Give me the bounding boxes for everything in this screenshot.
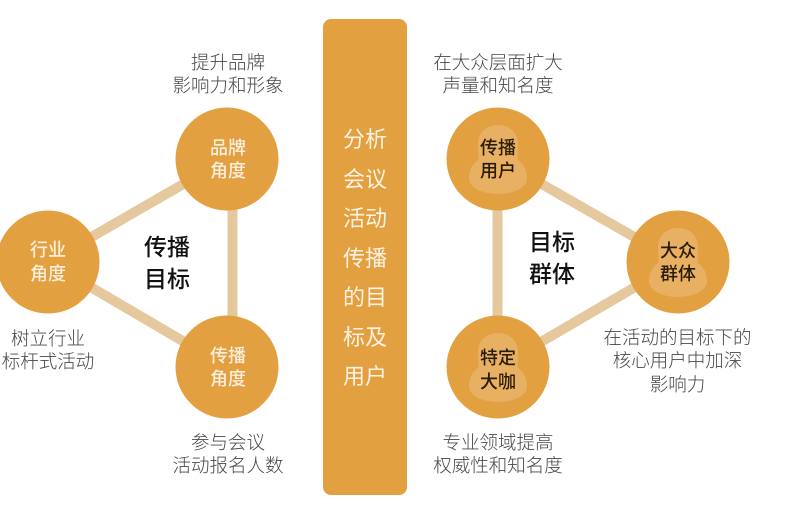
- caption: mass audience: [603, 327, 752, 395]
- center label: communication goals: 目标: [144, 266, 190, 292]
- center vertical bar with title: 标及: [343, 325, 387, 350]
- center vertical bar with title: 的目: [343, 285, 387, 310]
- center label: target groups: [529, 229, 575, 287]
- caption: key experts: 权威性和知名度: [433, 455, 563, 476]
- center label: target groups: 群体: [529, 261, 575, 287]
- node: communication users: 用户: [480, 161, 516, 181]
- caption: communication users: 声量和知名度: [442, 75, 554, 96]
- node: communication angle: [176, 316, 278, 418]
- caption: key experts: 专业领域提高: [442, 432, 554, 453]
- caption: mass audience: 影响力: [650, 374, 705, 395]
- node: industry angle: 角度: [30, 264, 66, 284]
- node: communication angle: 传播: [210, 346, 246, 366]
- center vertical bar with title: 传播: [343, 246, 387, 271]
- caption: communication: [172, 432, 284, 476]
- center vertical bar with title: 分析: [343, 127, 387, 152]
- caption: key experts: [433, 432, 563, 476]
- node: industry angle: [0, 210, 100, 314]
- center label: communication goals: 传播: [144, 234, 190, 260]
- node: key experts: 大咖: [480, 372, 516, 392]
- center vertical bar with title: 会议: [343, 167, 387, 192]
- caption: brand: 提升品牌: [191, 52, 265, 73]
- node: brand angle: 角度: [210, 161, 246, 181]
- caption: brand: [172, 52, 284, 96]
- node: brand angle: [176, 108, 278, 210]
- caption: industry: [2, 328, 94, 372]
- caption: communication: 活动报名人数: [172, 455, 284, 476]
- node: mass audience: [626, 210, 730, 314]
- node: communication users: [446, 108, 550, 210]
- caption: communication: 参与会议: [191, 432, 265, 453]
- node: mass audience: 大众: [660, 241, 696, 261]
- node: communication users: 传播: [480, 138, 516, 158]
- caption: industry: 树立行业: [11, 328, 85, 349]
- caption: brand: 影响力和形象: [172, 75, 284, 96]
- caption: communication users: 在大众层面扩大: [433, 52, 563, 73]
- node: key experts: [446, 316, 550, 418]
- node: communication angle: 角度: [210, 369, 246, 389]
- caption: mass audience: 核心用户中加深: [613, 350, 742, 371]
- node: key experts: 特定: [480, 348, 516, 368]
- caption: industry: 标杆式活动: [2, 351, 94, 372]
- caption: mass audience: 在活动的目标下的: [603, 327, 752, 348]
- node: industry angle: 行业: [30, 240, 66, 260]
- center vertical bar with title: 活动: [343, 206, 387, 231]
- node: brand angle: 品牌: [210, 138, 246, 158]
- left triangle diagram: communication goals: [0, 108, 278, 418]
- caption: communication users: [433, 52, 563, 96]
- center vertical bar with title: 用户: [343, 364, 387, 389]
- center label: communication goals: [144, 234, 190, 292]
- center label: target groups: 目标: [529, 229, 575, 255]
- node: mass audience: 群体: [660, 264, 696, 284]
- connector lines: [48, 159, 232, 367]
- connector lines: [498, 159, 678, 367]
- right triangle diagram: target groups: [446, 108, 730, 418]
- center vertical bar with title: [323, 19, 407, 495]
